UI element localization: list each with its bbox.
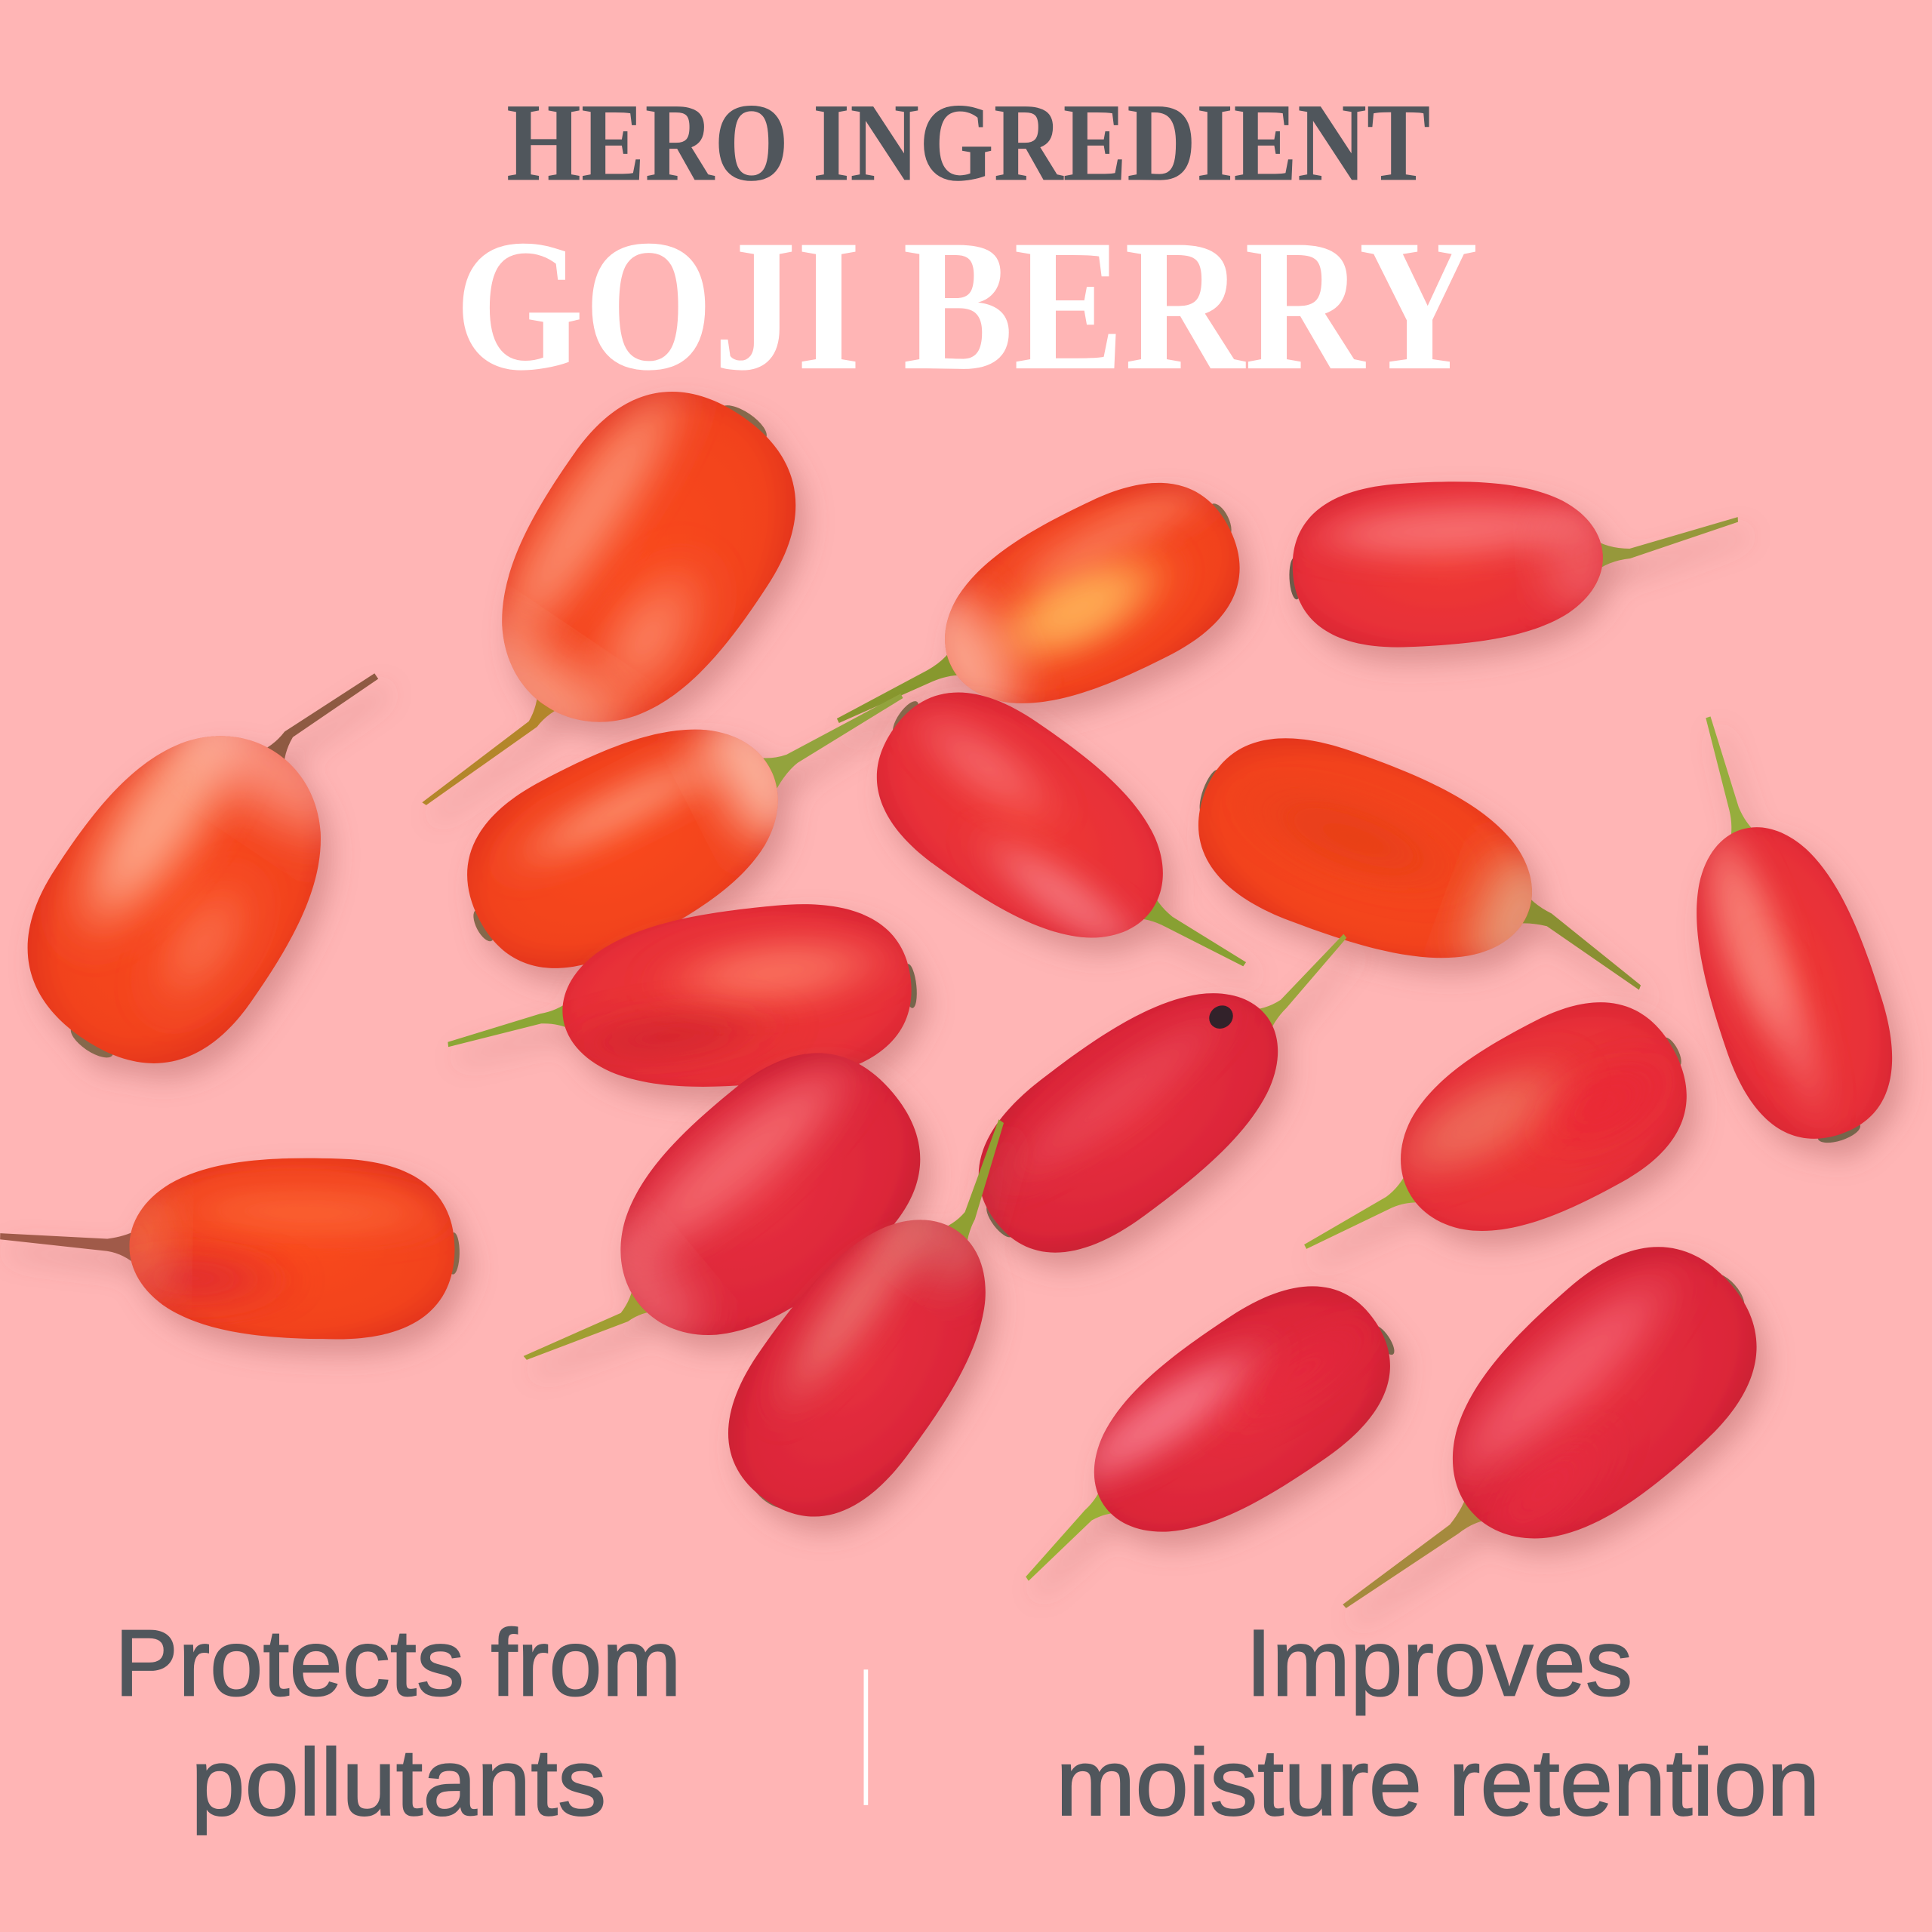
berry group illustration [0,344,1919,1694]
dark spot [1204,1001,1238,1033]
berry: lower right of center [1263,968,1721,1327]
stem [445,1001,574,1047]
stem [924,1119,1041,1253]
stem [1006,1481,1127,1581]
stem [1592,517,1740,573]
berry: center crimson with dark spot [941,881,1407,1291]
berry body [691,1168,1039,1552]
berry: top middle [836,483,1259,728]
stem [0,1227,138,1266]
stem [1503,888,1658,990]
stem [1245,934,1366,1038]
stem [422,669,567,839]
berry body [564,1012,961,1393]
berry: top right [1284,466,1743,653]
berry body [1288,473,1609,653]
berry: bottom middle [969,1249,1426,1635]
berry body [1053,1251,1423,1577]
berry body [436,678,828,1002]
berry body [1663,804,1918,1160]
berry body [945,483,1259,728]
berry: far left [27,673,379,1088]
berry body [27,736,341,1088]
berry: center horizontal [437,892,925,1116]
text block: protects from pollutants [115,1610,681,1835]
berry body [501,392,815,747]
stem [749,681,917,800]
text block: improves moisture retention: Improves [1246,1610,1632,1716]
text block: protects from pollutants: pollutants [191,1729,606,1835]
stem [524,1270,660,1397]
berry body [115,1155,457,1341]
berry body [944,948,1318,1290]
text block: improves moisture retention [1056,1610,1820,1835]
stem [1296,1168,1427,1263]
berry: top center large [422,392,815,805]
title: goji berry: GOJI BERRY [454,201,1478,410]
divider [863,1669,868,1805]
berry: center right red [840,655,1290,1044]
berry body [554,892,920,1104]
stem [1342,1490,1495,1633]
berry: far right [1627,693,1919,1165]
berry: center left orange [430,617,947,1005]
title: hero ingredient: HERO INGREDIENT [506,81,1431,205]
text block: protects from pollutants: Protects from [115,1610,681,1716]
berry: bottom right [1287,1204,1799,1694]
text block: improves moisture retention: moisture retention [1056,1729,1820,1835]
stem [1690,714,1758,844]
berry: lower center wide [479,1012,961,1464]
berry body [1366,970,1717,1272]
stem [255,643,380,787]
berry body [1404,1205,1798,1589]
berry body [1174,709,1579,1004]
stem [829,639,976,740]
stem [1128,886,1251,989]
berry: lower center crimson [691,1086,1099,1553]
berry body [843,657,1205,983]
berry: lower left horizontal [0,1152,461,1342]
berry: right orange [1171,708,1682,1041]
